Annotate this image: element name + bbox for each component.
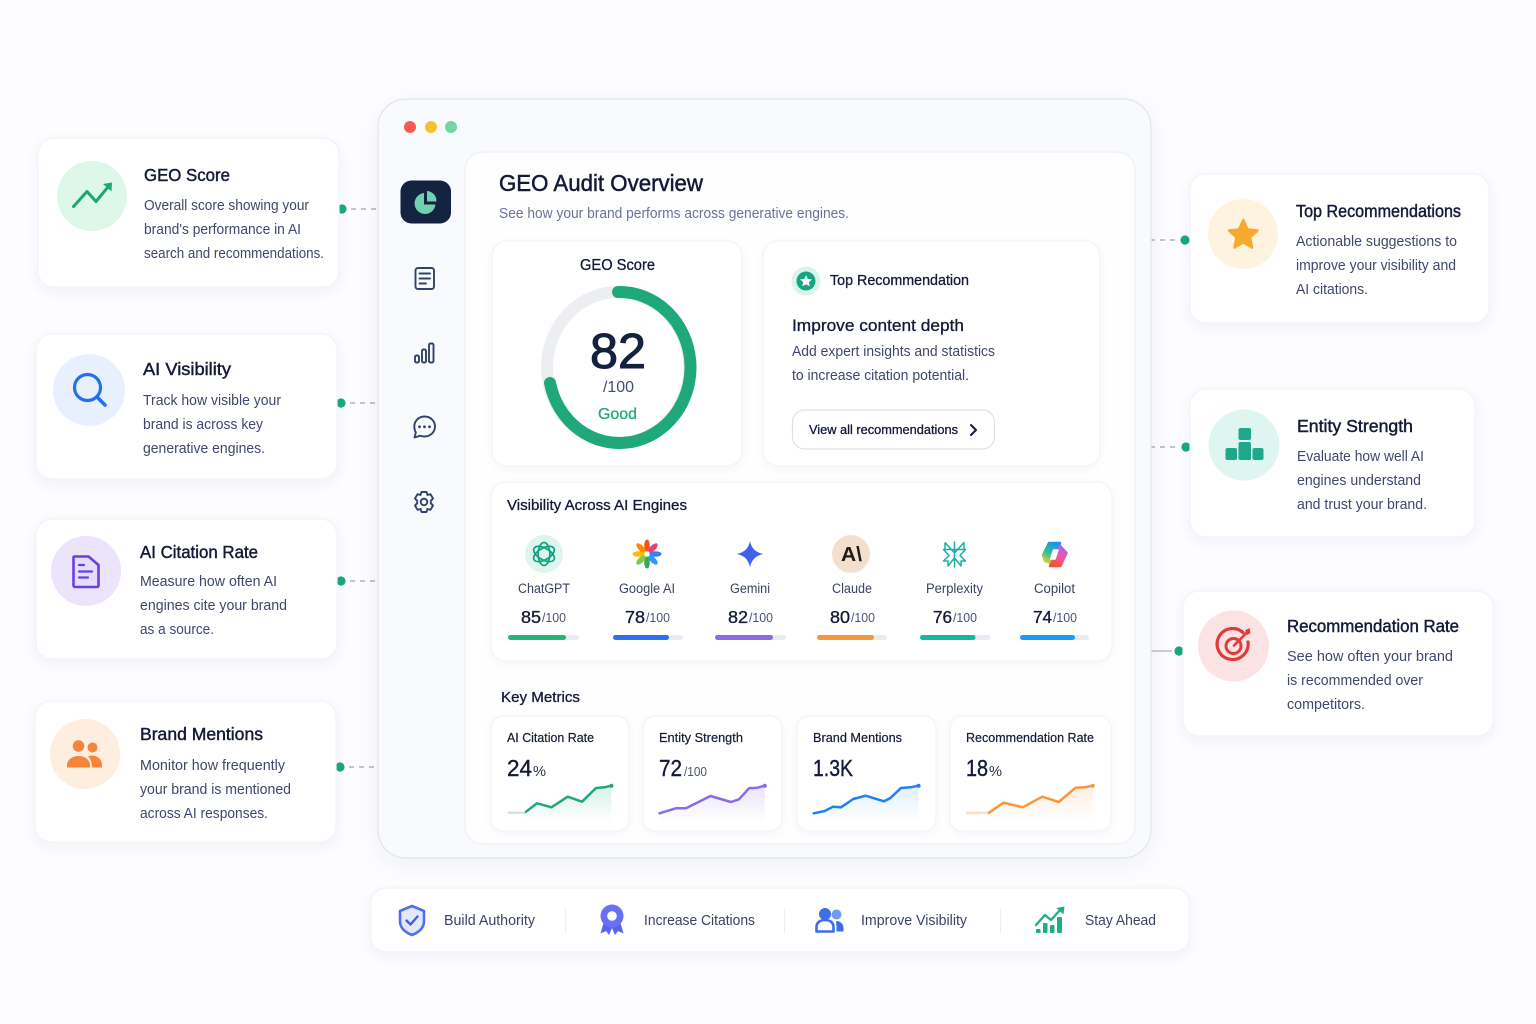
- engine: Google AI: /100: [646, 611, 670, 625]
- metric card: AI Citation Rate: 24: [507, 755, 532, 781]
- icon: sidebar active pie: [400, 180, 451, 224]
- metric card: Brand Mentions: [797, 716, 936, 831]
- engine: Copilot: /100: [1053, 611, 1077, 625]
- icon: document: [51, 536, 121, 606]
- panel: visibility across AI engines: [491, 482, 1112, 661]
- description: [144, 198, 324, 262]
- heading: Visibility Across AI Engines: [507, 497, 687, 514]
- panel: GEO Score callout: [38, 138, 339, 287]
- description: Actionable suggestions to: [1296, 234, 1457, 250]
- metric card: Entity Strength: /100: [684, 765, 707, 779]
- engine: Gemini: /100: [749, 611, 773, 625]
- connector: AI Visibility: [336, 398, 379, 408]
- label: Improve Visibility: [861, 913, 968, 929]
- recommendation text: [792, 344, 995, 384]
- panel: main content: [465, 152, 1135, 844]
- engine: Copilot: Copilot: [1034, 581, 1075, 596]
- icon: sidebar chat: [414, 416, 435, 438]
- heading: Top Recommendation: [830, 273, 969, 289]
- heading: Top Recommendations: [1296, 201, 1461, 221]
- description: [140, 574, 287, 638]
- engine: ChatGPT: ChatGPT: [518, 581, 570, 596]
- engine: Gemini: 82: [728, 607, 748, 627]
- panel: Recommendation Rate callout: [1183, 591, 1493, 736]
- gauge status: Good: [598, 406, 637, 423]
- panel: Brand Mentions callout: [35, 701, 336, 842]
- description: Overall score showing your: [144, 198, 309, 214]
- engine: Claude: 80: [830, 607, 850, 627]
- label: Stay Ahead: [1085, 913, 1156, 929]
- metric card: Recommendation Rate: [950, 716, 1111, 831]
- panel: GEO score gauge: [492, 241, 742, 466]
- icon: people: [816, 908, 844, 932]
- metric card: AI Citation Rate: [491, 716, 629, 831]
- icon: trend line: [57, 161, 127, 231]
- description: [140, 758, 291, 822]
- icon: Copilot: [1043, 543, 1066, 566]
- recommendation text: to increase citation potential.: [792, 368, 969, 384]
- icon: target: [1198, 610, 1269, 682]
- description: your brand is mentioned: [140, 782, 291, 798]
- metric card: AI Citation Rate: AI Citation Rate: [507, 730, 594, 745]
- engine: Perplexity: [920, 542, 990, 640]
- description: [1287, 649, 1453, 713]
- connector: Top Recommendations: [1150, 235, 1190, 245]
- icon: Google AI: [632, 540, 662, 568]
- engine: ChatGPT: [508, 535, 579, 640]
- metric card: Recommendation Rate: %: [989, 763, 1002, 780]
- description: and trust your brand.: [1297, 497, 1427, 513]
- heading: Entity Strength: [1297, 416, 1413, 436]
- metric card: Brand Mentions: Brand Mentions: [813, 730, 902, 745]
- engine: Claude: /100: [851, 611, 875, 625]
- panel: bottom benefits bar: [371, 888, 1189, 952]
- description: AI citations.: [1296, 282, 1368, 298]
- description: as a source.: [140, 622, 214, 638]
- icon: star: [1208, 199, 1278, 269]
- description: [143, 393, 281, 457]
- panel: Entity Strength callout: [1190, 389, 1475, 537]
- title: GEO Audit Overview: [499, 170, 703, 196]
- engine: Google AI: 78: [625, 607, 645, 627]
- icon: sidebar gear: [415, 492, 433, 512]
- description: See how often your brand: [1287, 649, 1453, 665]
- icon: magnifier: [53, 354, 125, 426]
- recommendation text: Add expert insights and statistics: [792, 344, 995, 360]
- sparkline: [508, 784, 613, 822]
- metric card: Entity Strength: [643, 716, 782, 831]
- heading: AI Visibility: [143, 359, 231, 379]
- recommendation title: Improve content depth: [792, 316, 964, 335]
- sparkline: [966, 784, 1095, 822]
- description: Measure how often AI: [140, 574, 277, 590]
- sparkline: [814, 784, 921, 822]
- description: brand is across key: [143, 417, 264, 433]
- gauge scale: /100: [603, 379, 634, 396]
- description: [1296, 234, 1457, 298]
- engine: Copilot: 74: [1033, 607, 1052, 627]
- connector: Brand Mentions: [335, 762, 379, 772]
- heading: AI Citation Rate: [140, 542, 258, 562]
- label: Build Authority: [444, 913, 536, 929]
- engine: Google AI: [613, 540, 683, 640]
- heading: Brand Mentions: [140, 724, 263, 744]
- description: search and recommendations.: [144, 246, 324, 262]
- icon: Gemini: [736, 541, 764, 568]
- icon: ChatGPT: [525, 535, 563, 573]
- description: competitors.: [1287, 697, 1365, 713]
- heading: GEO Score: [580, 257, 655, 274]
- engine: Perplexity: /100: [953, 611, 977, 625]
- engine: Claude: [817, 535, 887, 640]
- icon: ribbon: [600, 904, 624, 935]
- connector: GEO Score: [337, 204, 379, 214]
- metric card: Recommendation Rate: Recommendation Rate: [966, 730, 1094, 745]
- connector: AI Citation Rate: [336, 576, 379, 586]
- metric card: Entity Strength: Entity Strength: [659, 730, 743, 745]
- panel: AI Visibility callout: [36, 334, 337, 479]
- button: View all recommendations: [809, 422, 958, 437]
- icon: Claude: A\: [841, 544, 862, 566]
- description: is recommended over: [1287, 673, 1423, 689]
- icon: people: [50, 719, 120, 789]
- heading: GEO Score: [144, 165, 230, 185]
- description: engines cite your brand: [140, 598, 287, 614]
- engine: Gemini: Gemini: [730, 581, 770, 596]
- gauge ring: [547, 292, 690, 443]
- panel: AI Citation Rate callout: [36, 519, 337, 659]
- engine: Perplexity: 76: [933, 607, 952, 627]
- description: engines understand: [1297, 473, 1421, 489]
- engine: Google AI: Google AI: [619, 581, 675, 596]
- description: Monitor how frequently: [140, 758, 286, 774]
- engine: ChatGPT: /100: [542, 611, 566, 625]
- description: improve your visibility and: [1296, 258, 1456, 274]
- engine: Perplexity: Perplexity: [926, 581, 983, 596]
- icon: growth chart: [1036, 906, 1064, 933]
- icon: star badge: [792, 266, 820, 296]
- engine: Copilot: [1020, 543, 1089, 640]
- sparkline: [660, 784, 767, 822]
- description: Track how visible your: [143, 393, 281, 409]
- description: [1297, 449, 1427, 513]
- metric card: Brand Mentions: 1.3K: [813, 755, 854, 781]
- icon: shield: [400, 906, 424, 935]
- icon: blocks: [1208, 410, 1280, 480]
- connector: Entity Strength: [1150, 442, 1191, 452]
- description: brand's performance in AI: [144, 222, 301, 238]
- description: Evaluate how well AI: [1297, 449, 1424, 465]
- label: Increase Citations: [644, 913, 755, 929]
- metric card: Entity Strength: 72: [659, 755, 682, 781]
- heading: key metrics: Key Metrics: [501, 690, 580, 706]
- subtitle: See how your brand performs across generative engines.: [499, 206, 849, 222]
- gauge value: 82: [590, 325, 646, 379]
- panel: dashboard window: [378, 99, 1151, 858]
- window controls: [404, 121, 457, 133]
- metric card: AI Citation Rate: %: [533, 763, 546, 780]
- connector: Recommendation Rate: [1150, 646, 1184, 656]
- description: generative engines.: [143, 441, 265, 457]
- engine: ChatGPT: 85: [521, 607, 541, 627]
- icon: sidebar document: [416, 268, 434, 289]
- panel: top recommendation: [763, 241, 1100, 466]
- icon: sidebar bars: [415, 344, 434, 362]
- description: across AI responses.: [140, 806, 268, 822]
- panel: Top Recommendations callout: [1190, 174, 1489, 323]
- heading: Recommendation Rate: [1287, 616, 1459, 636]
- button: [792, 410, 994, 449]
- engine: Gemini: [715, 541, 786, 640]
- metric card: Recommendation Rate: 18: [966, 755, 988, 781]
- engine: Claude: Claude: [832, 581, 872, 596]
- icon: Perplexity: [944, 542, 966, 568]
